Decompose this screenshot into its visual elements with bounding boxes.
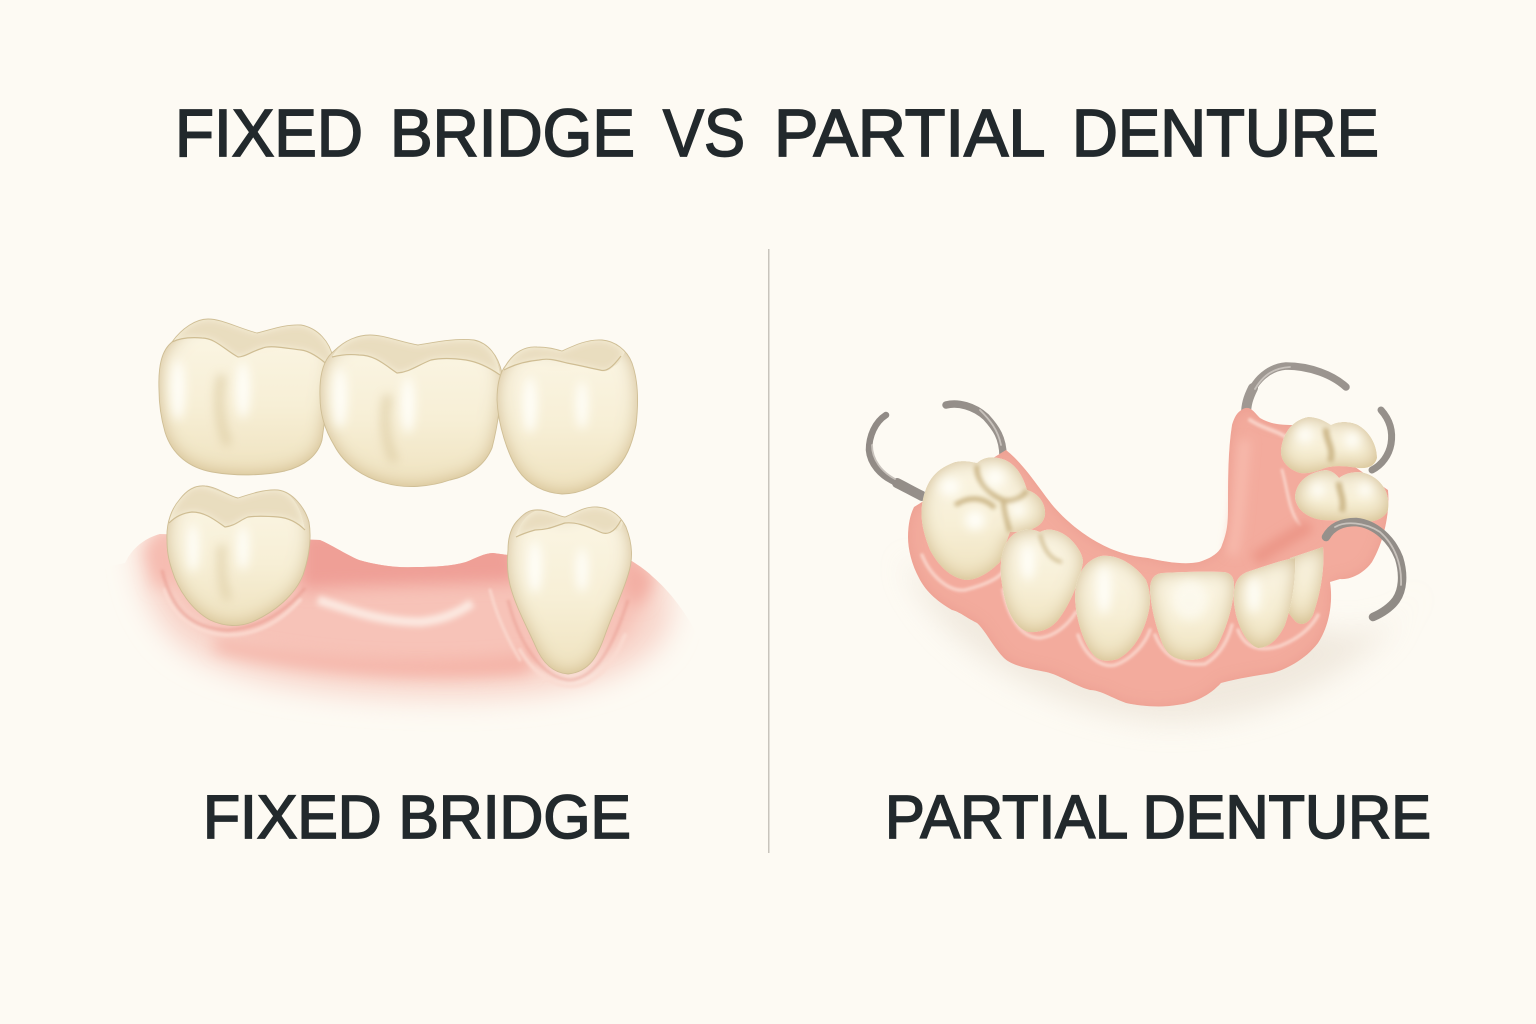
crown: centre bbox=[320, 335, 502, 487]
label: partial denture: PARTIAL DENTURE bbox=[885, 783, 1431, 851]
panel divider bbox=[768, 249, 770, 853]
title: VS bbox=[663, 96, 745, 171]
tooth: lower right abutment bbox=[507, 507, 632, 674]
molars back right bbox=[1281, 417, 1388, 522]
crown: right pontic bbox=[497, 340, 638, 494]
tooth: premolar bbox=[1001, 529, 1083, 632]
gum highlights bbox=[922, 420, 1318, 665]
title: BRIDGE bbox=[390, 96, 635, 171]
tooth: lower left abutment bbox=[167, 486, 310, 626]
title: DENTURE bbox=[1072, 96, 1379, 171]
panel: fixed bridge illustration bbox=[137, 319, 672, 698]
tooth: left molar bbox=[921, 457, 1045, 580]
panel: partial denture illustration bbox=[869, 366, 1420, 722]
teeth left and front bbox=[921, 457, 1323, 661]
title: FIXED bbox=[175, 96, 363, 171]
shadow bbox=[905, 560, 1420, 722]
clasp: lower right bbox=[1326, 522, 1402, 617]
tooth: last front bbox=[1285, 547, 1323, 624]
gum highlight bbox=[318, 600, 472, 622]
tooth: central incisor bbox=[1150, 572, 1234, 660]
gum bbox=[137, 530, 672, 698]
denture base bbox=[908, 408, 1388, 706]
title: PARTIAL bbox=[774, 96, 1044, 171]
label: fixed bridge: FIXED BRIDGE bbox=[203, 783, 631, 851]
tooth: lateral incisor bbox=[1234, 558, 1295, 648]
tooth: canine bbox=[1075, 556, 1150, 661]
crown: left pontic bbox=[159, 319, 333, 475]
metal clasps bbox=[869, 366, 1392, 496]
